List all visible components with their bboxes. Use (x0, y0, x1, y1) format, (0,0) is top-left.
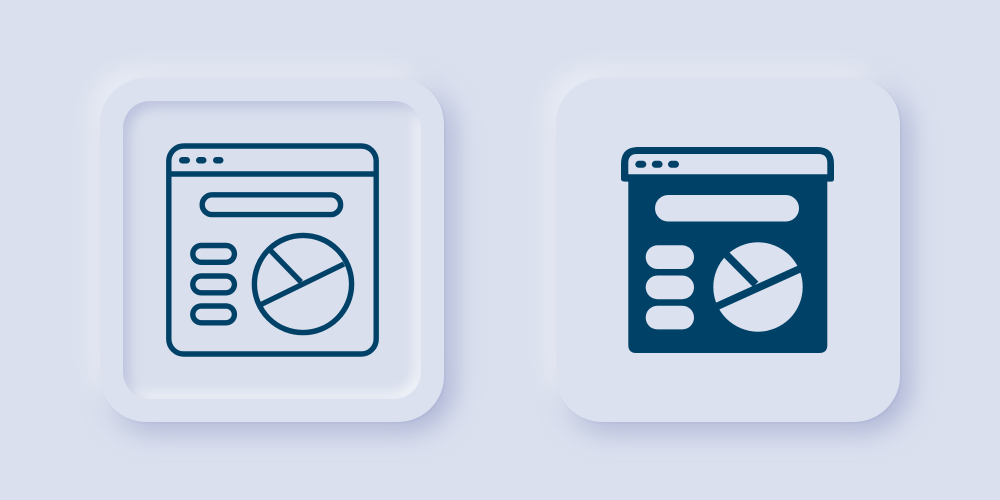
window body (628, 174, 827, 353)
header cap (621, 147, 834, 182)
panel: outlined icon card (100, 78, 444, 422)
header opening (628, 154, 827, 174)
inset well (123, 101, 421, 399)
search bar (202, 195, 341, 215)
header divider (169, 171, 376, 177)
icon: outlined browser window with pie chart (169, 146, 376, 354)
window dots (179, 157, 224, 164)
window dots (635, 161, 679, 168)
pie chart (254, 235, 352, 333)
panel: filled icon card (556, 78, 900, 422)
pie chart (705, 242, 812, 332)
search bar (655, 195, 799, 222)
icon: filled browser window with pie chart (621, 147, 834, 353)
list pills (193, 246, 234, 323)
window frame (169, 146, 376, 354)
list pills (646, 245, 694, 329)
